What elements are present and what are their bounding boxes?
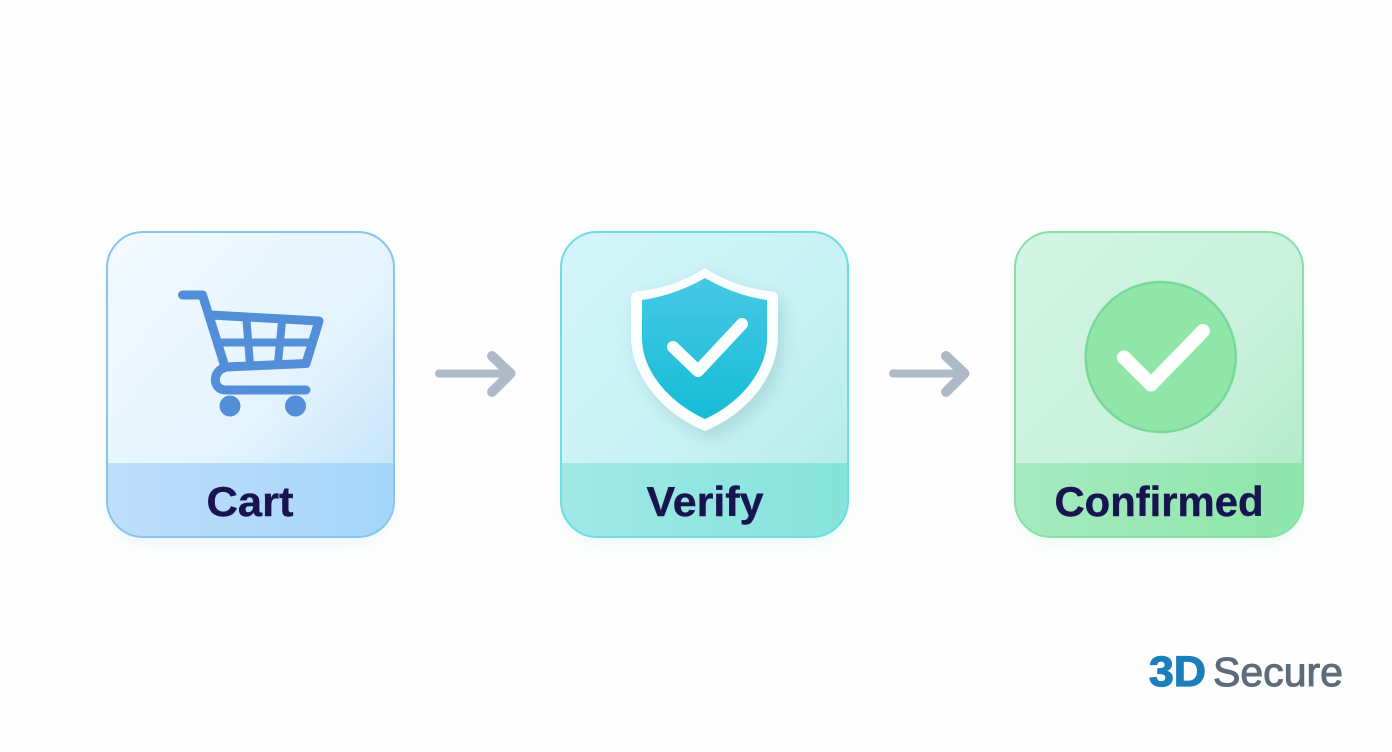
icon: shield with check <box>631 268 783 438</box>
icon: circle with check <box>1086 282 1236 432</box>
label: Confirmed: Confirmed <box>1054 478 1264 525</box>
logo: 3D Secure <box>1149 648 1343 696</box>
panel: Confirmed step <box>1015 232 1303 543</box>
arrow: Cart to Verify <box>439 356 510 392</box>
label: Cart: Cart <box>206 478 294 525</box>
logo: 3D Secure: Secure <box>1213 649 1343 695</box>
panel: Verify step <box>561 232 848 543</box>
arrow: Verify to Confirmed <box>893 356 964 392</box>
icon: shopping cart <box>182 295 319 416</box>
panel: Cart step <box>107 232 394 543</box>
logo: 3D Secure: 3D <box>1149 648 1206 696</box>
label: Verify: Verify <box>646 478 764 525</box>
